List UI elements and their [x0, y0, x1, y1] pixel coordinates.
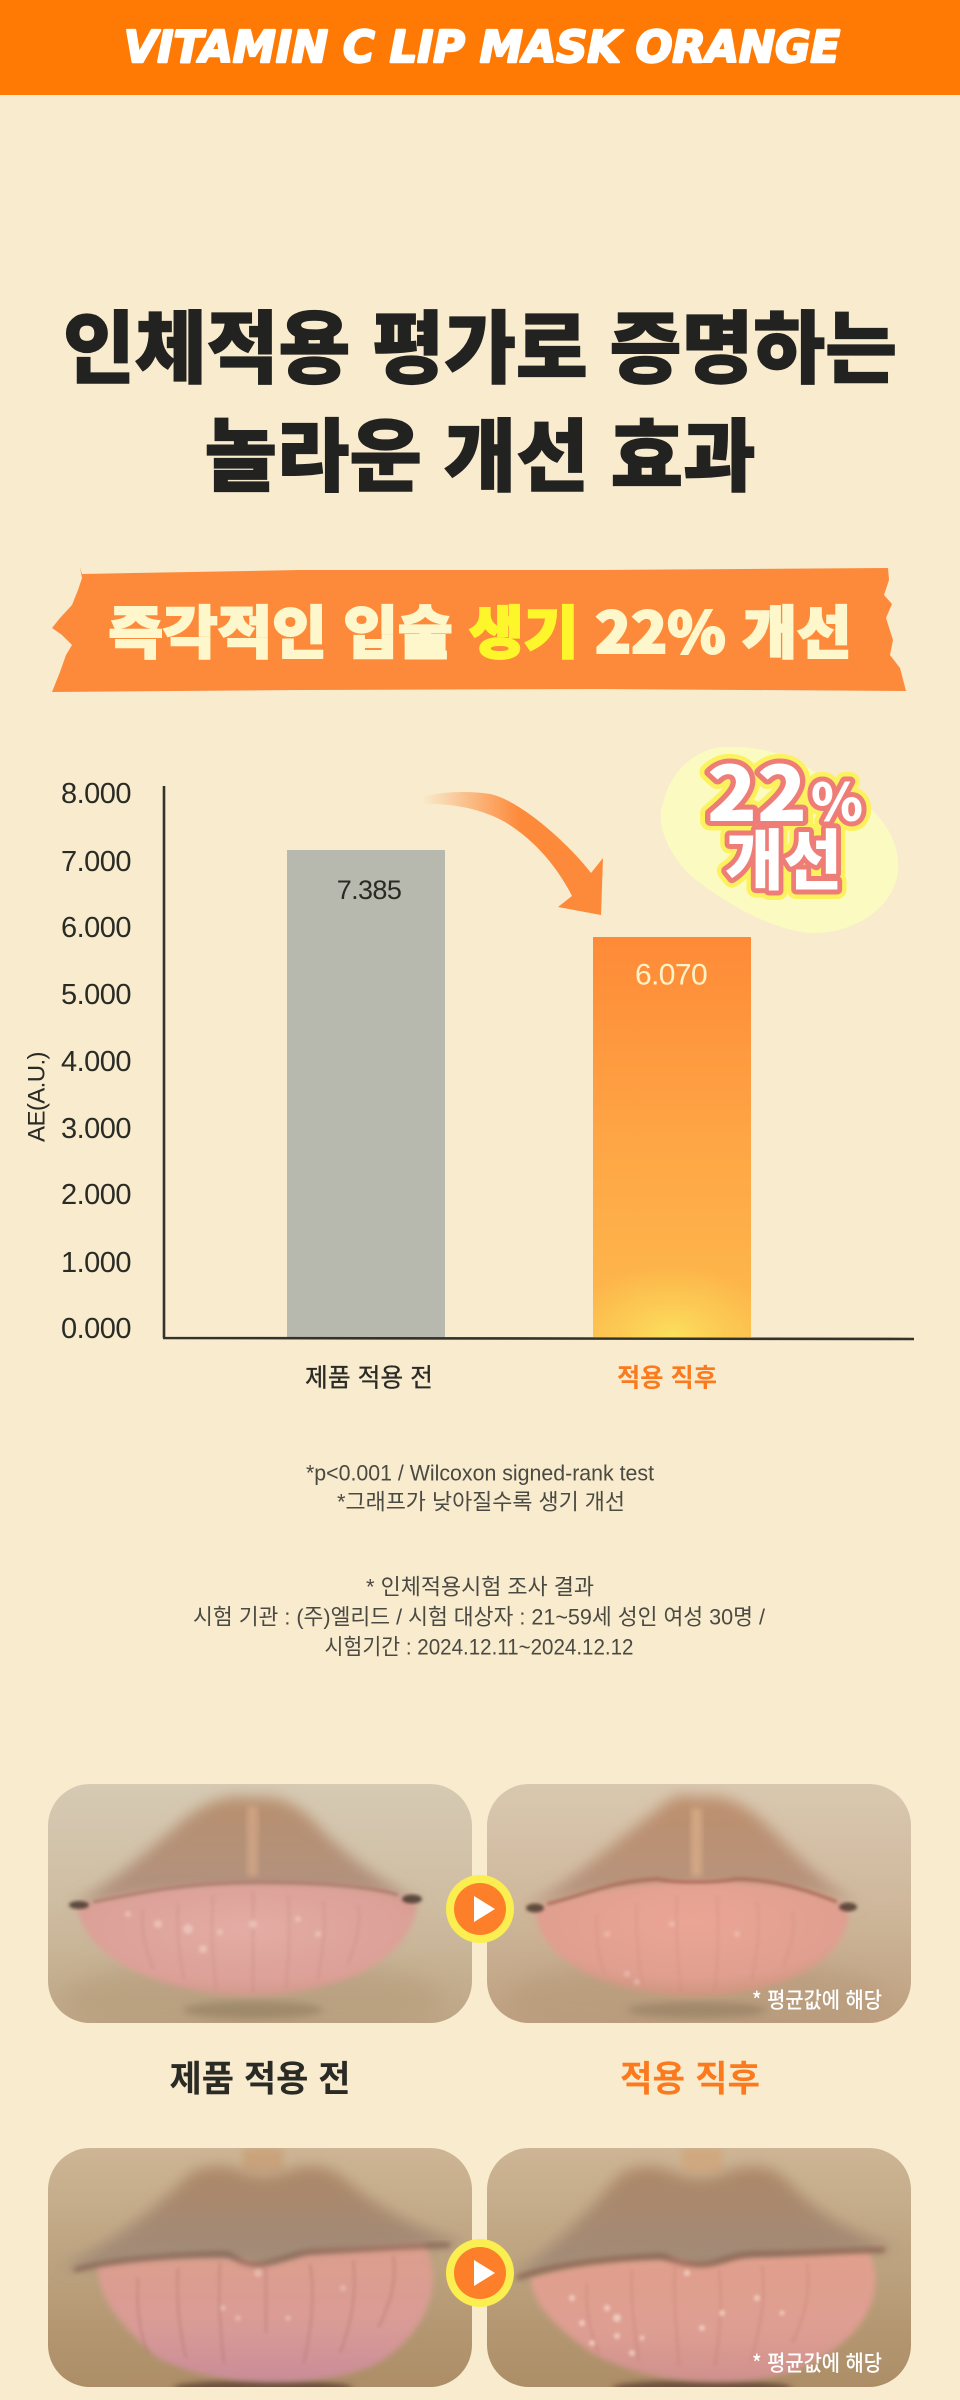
bar: after — [593, 937, 751, 1337]
bar chart — [24, 778, 914, 1409]
main title — [63, 284, 897, 508]
photo: lips after, row 2 — [487, 2148, 911, 2396]
curved arrow — [422, 792, 603, 915]
statistics footnote: *p<0.001 / Wilcoxon signed-rank test — [306, 1460, 654, 1486]
play icon, row 1 — [446, 1875, 514, 1943]
badge text glow: 22 — [707, 733, 807, 843]
bar: before: 7.385 — [337, 875, 401, 905]
y axis labels: 4.000 — [61, 1046, 131, 1078]
y axis labels — [61, 778, 131, 1345]
badge text: 22 — [707, 733, 807, 843]
header title: VITAMIN C LIP MASK ORANGE — [124, 22, 840, 73]
22% improvement badge — [661, 733, 898, 933]
study details: 시험 기관 : (주)엘리드 / 시험 대상자 : 21~59세 성인 여성 30명 / — [193, 1604, 766, 1630]
badge text: % — [811, 761, 863, 836]
y axis labels: 6.000 — [61, 912, 131, 944]
y axis labels: 1.000 — [61, 1247, 131, 1279]
main title: 인체적용 평가로 증명하는 — [63, 284, 897, 400]
badge text glow: % — [811, 761, 863, 836]
play icon, row 2 — [446, 2239, 514, 2307]
y axis title: AE(A.U.) — [24, 1052, 50, 1142]
banner headline: 즉각적인 입술 생기 22% 개선 — [108, 588, 852, 670]
category label: after: 적용 직후 — [617, 1358, 717, 1394]
main title: 놀라운 개선 효과 — [204, 392, 756, 508]
y axis labels: 5.000 — [61, 979, 131, 1011]
y axis labels: 2.000 — [61, 1179, 131, 1211]
statistics footnote: *그래프가 낮아질수록 생기 개선 — [337, 1490, 625, 1514]
average-value note: * 평균값에 해당 — [752, 1983, 882, 2015]
bar: before — [287, 850, 445, 1337]
study details: * 인체적용시험 조사 결과 — [366, 1574, 594, 1600]
header band — [0, 0, 960, 95]
torn tape banner — [52, 567, 906, 692]
statistics footnote — [306, 1460, 654, 1514]
study details: 시험기간 : 2024.12.11~2024.12.12 — [324, 1634, 634, 1660]
photo: lips after, row 1 — [487, 1784, 911, 2039]
y axis labels: 8.000 — [61, 778, 131, 810]
photo: lips before, row 2 — [48, 2148, 472, 2396]
y axis labels: 0.000 — [61, 1313, 131, 1345]
badge text glow: 개선 — [725, 808, 842, 904]
study details — [193, 1574, 766, 1660]
y axis labels: 7.000 — [61, 846, 131, 878]
photo label: after: 적용 직후 — [620, 2050, 760, 2102]
badge text — [707, 733, 863, 904]
photo label: before: 제품 적용 전 — [170, 2050, 350, 2102]
bar: after: 6.070 — [635, 958, 707, 992]
y axis labels: 3.000 — [61, 1113, 131, 1145]
badge text glow — [707, 733, 863, 904]
category label: before: 제품 적용 전 — [305, 1358, 433, 1394]
average-value note: * 평균값에 해당 — [752, 2346, 882, 2378]
badge text: 개선 — [725, 808, 842, 904]
photo: lips before, row 1 — [48, 1784, 472, 2039]
